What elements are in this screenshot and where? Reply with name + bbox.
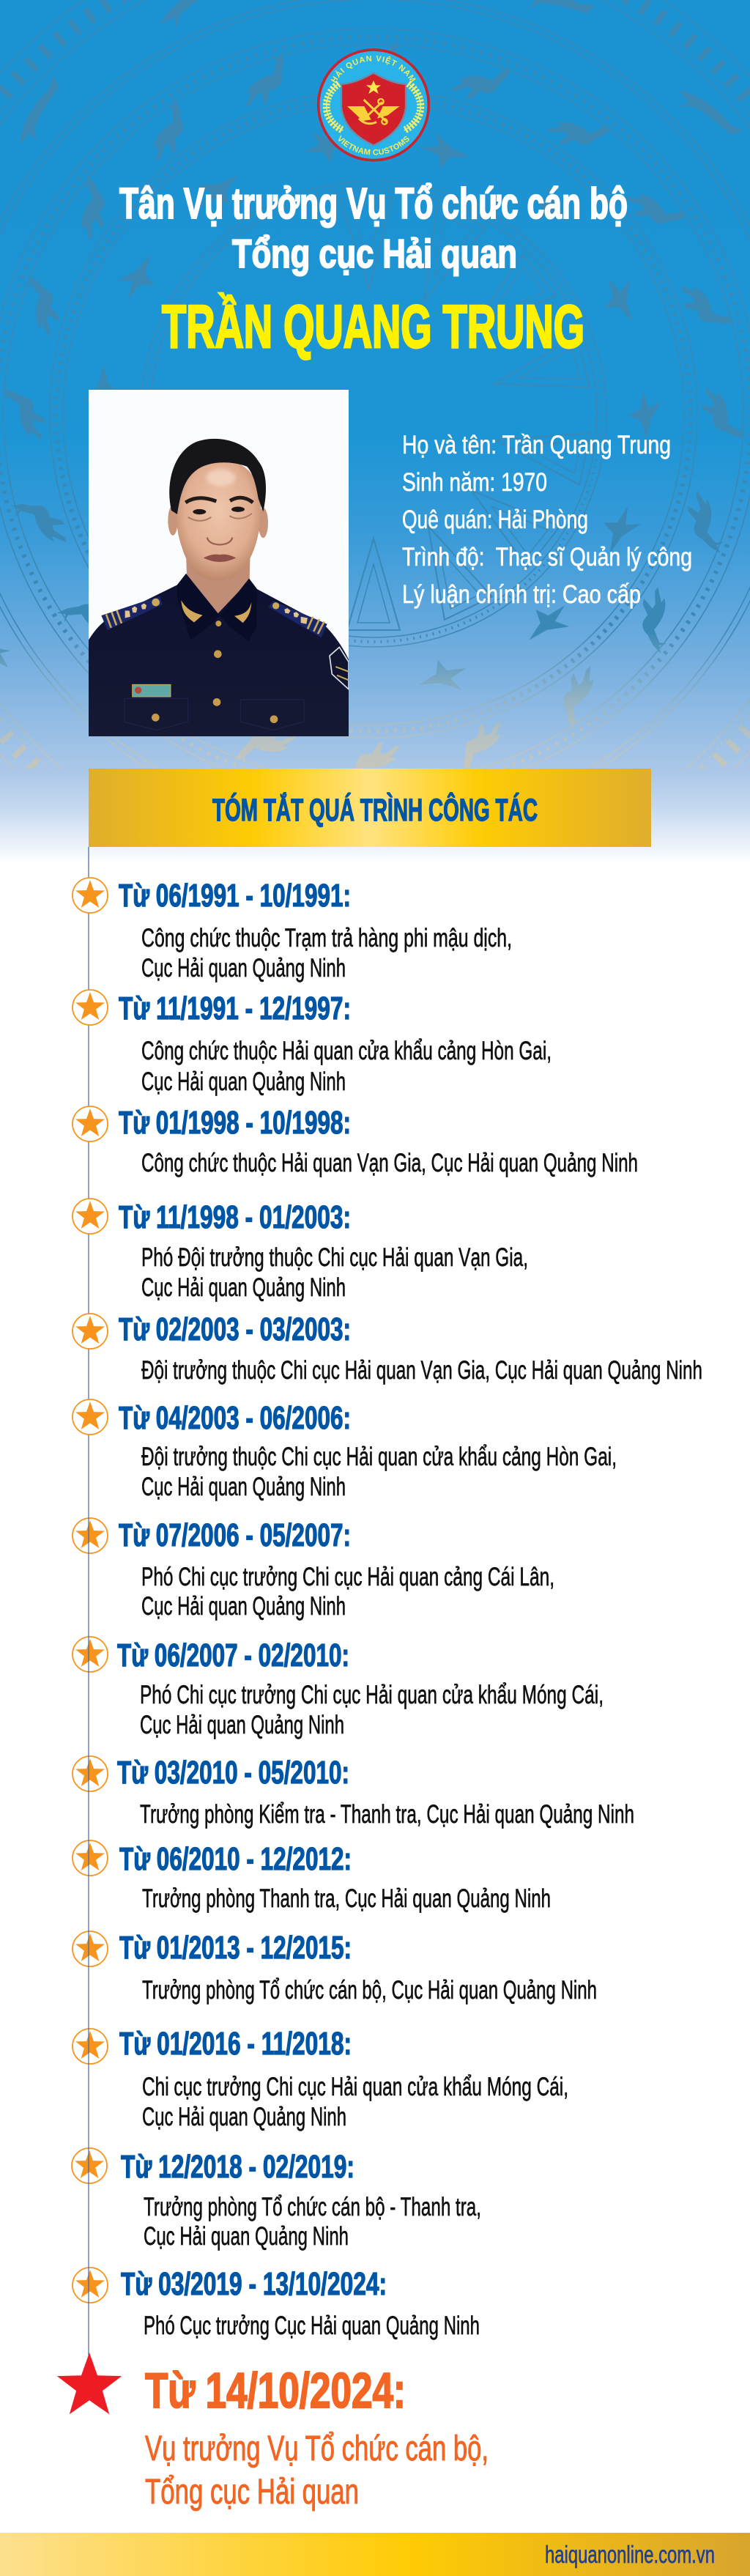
section banner: TÓM TẮT QUÁ TRÌNH CÔNG TÁC bbox=[212, 792, 538, 828]
timeline item 4: Cục Hải quan Quảng Ninh bbox=[141, 1273, 346, 1302]
current position: Vụ trưởng Vụ Tổ chức cán bộ, bbox=[145, 2429, 489, 2468]
section banner bbox=[89, 769, 651, 847]
timeline item 4: Từ 11/1998 - 01/2003: bbox=[119, 1199, 351, 1235]
timeline item 12: Từ 01/2016 - 11/2018: bbox=[119, 2026, 352, 2062]
timeline item 4: Phó Đội trưởng thuộc Chi cục Hải quan Vạn Gia, bbox=[141, 1243, 528, 1272]
personal information: Trình độ: Thạc sĩ Quản lý công bbox=[402, 543, 692, 571]
icon: red star bbox=[57, 2353, 122, 2414]
personal information: Quê quán: Hải Phòng bbox=[402, 506, 588, 534]
timeline item 7: Phó Chi cục trưởng Chi cục Hải quan cảng Cái Lân, bbox=[141, 1563, 554, 1591]
logo: Vietnam Customs emblem: HẢI QUAN VIỆT NAM bbox=[331, 56, 416, 84]
timeline item 2: Từ 11/1991 - 12/1997: bbox=[119, 991, 351, 1026]
timeline item 6: Cục Hải quan Quảng Ninh bbox=[141, 1473, 346, 1501]
timeline item 14 bbox=[73, 2266, 480, 2340]
title bbox=[119, 179, 628, 276]
timeline item 12: Chi cục trưởng Chi cục Hải quan cửa khẩu Móng Cái, bbox=[142, 2073, 568, 2101]
personal information: Sinh năm: 1970 bbox=[402, 468, 547, 497]
timeline item 13: Cục Hải quan Quảng Ninh bbox=[144, 2222, 349, 2251]
timeline item 8: Cục Hải quan Quảng Ninh bbox=[140, 1711, 344, 1739]
timeline item 8: Từ 06/2007 - 02/2010: bbox=[117, 1637, 349, 1673]
footer band bbox=[0, 2533, 750, 2576]
timeline item 7: Cục Hải quan Quảng Ninh bbox=[141, 1592, 346, 1621]
timeline item 13 bbox=[72, 2148, 481, 2251]
timeline item 1: Từ 06/1991 - 10/1991: bbox=[119, 878, 351, 914]
timeline item 7 bbox=[73, 1517, 554, 1621]
timeline item 1: Công chức thuộc Trạm trả hàng phi mậu dịch, bbox=[141, 924, 512, 952]
timeline item 3 bbox=[73, 1105, 638, 1177]
timeline item 14: Từ 03/2019 - 13/10/2024: bbox=[121, 2266, 387, 2302]
timeline item 5: Từ 02/2003 - 03/2003: bbox=[119, 1311, 351, 1347]
timeline item 1 bbox=[73, 878, 512, 982]
timeline item 4 bbox=[73, 1199, 528, 1302]
timeline item 12: Cục Hải quan Quảng Ninh bbox=[142, 2103, 346, 2131]
header background bbox=[0, 0, 750, 919]
timeline item 13: Từ 12/2018 - 02/2019: bbox=[121, 2149, 354, 2185]
timeline item 6: Từ 04/2003 - 06/2006: bbox=[119, 1400, 351, 1436]
timeline item 9 bbox=[73, 1755, 634, 1829]
timeline item 5 bbox=[73, 1311, 702, 1385]
timeline item 3: Từ 01/1998 - 10/1998: bbox=[119, 1105, 351, 1141]
timeline item 2 bbox=[73, 990, 552, 1096]
timeline item 11 bbox=[73, 1930, 597, 2005]
timeline item 2: Công chức thuộc Hải quan cửa khẩu cảng Hòn Gai, bbox=[141, 1037, 552, 1065]
timeline item 10: Trưởng phòng Thanh tra, Cục Hải quan Quảng Ninh bbox=[142, 1884, 551, 1913]
personal information: Lý luận chính trị: Cao cấp bbox=[402, 580, 641, 609]
timeline item 6 bbox=[73, 1399, 617, 1501]
personal information: Họ và tên: Trần Quang Trung bbox=[402, 431, 671, 459]
timeline item 8 bbox=[73, 1637, 604, 1739]
current position bbox=[145, 2363, 489, 2512]
timeline item 10 bbox=[73, 1840, 551, 1913]
portrait photo bbox=[89, 390, 349, 736]
current position: Tổng cục Hải quan bbox=[145, 2473, 359, 2512]
timeline item 14: Phó Cục trưởng Cục Hải quan Quảng Ninh bbox=[144, 2312, 480, 2340]
timeline item 11: Từ 01/2013 - 12/2015: bbox=[119, 1930, 352, 1966]
logo: Vietnam Customs emblem: VIETNAM CUSTOMS bbox=[338, 135, 409, 155]
current position: Từ 14/10/2024: bbox=[145, 2363, 406, 2418]
timeline item 13: Trưởng phòng Tổ chức cán bộ - Thanh tra, bbox=[144, 2193, 481, 2221]
timeline item 9: Từ 03/2010 - 05/2010: bbox=[117, 1755, 349, 1791]
timeline item 10: Từ 06/2010 - 12/2012: bbox=[119, 1841, 352, 1877]
timeline item 12 bbox=[73, 2026, 568, 2131]
title: Tổng cục Hải quan bbox=[232, 231, 517, 276]
timeline item 2: Cục Hải quan Quảng Ninh bbox=[141, 1067, 346, 1096]
timeline item 1: Cục Hải quan Quảng Ninh bbox=[141, 954, 346, 982]
logo: Vietnam Customs emblem bbox=[316, 48, 431, 161]
timeline item 7: Từ 07/2006 - 05/2007: bbox=[119, 1517, 351, 1553]
personal information bbox=[402, 431, 692, 609]
